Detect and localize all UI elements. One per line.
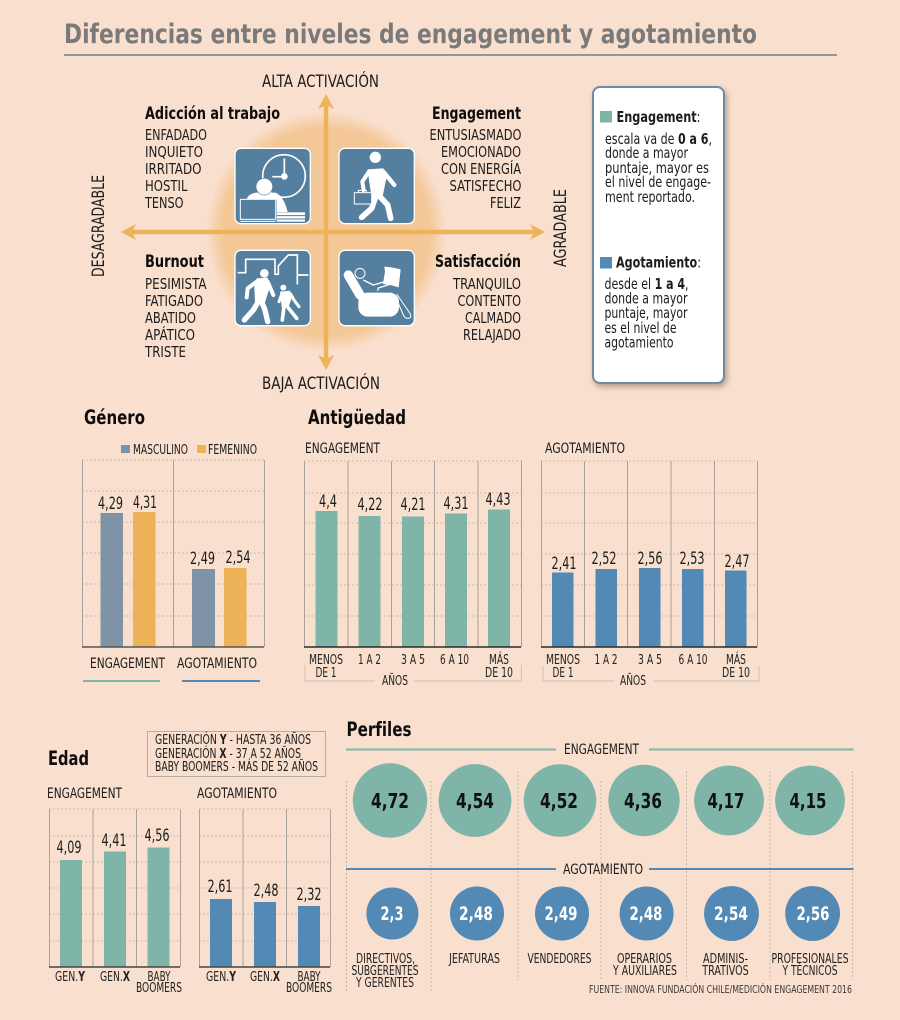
values: 4,09 bbox=[56, 838, 82, 857]
values: 4,29 bbox=[98, 494, 123, 513]
quadrant text: adiccion al trabajo bbox=[144, 104, 280, 212]
engagement circles: 4,17 bbox=[708, 789, 744, 813]
quadrant text: engagement: CON ENERGÍA bbox=[441, 159, 521, 178]
axis label: alta activacion: ALTA ACTIVACIÓN bbox=[262, 72, 379, 91]
engagement scale text: Engagement: bbox=[616, 108, 700, 126]
quadrant text: satisfaccion bbox=[435, 252, 521, 344]
quadrant text: burnout: APÁTICO bbox=[145, 325, 195, 344]
values: 2,53 bbox=[680, 549, 704, 568]
icon: person walking with briefcase bbox=[339, 148, 414, 224]
values: 4,21 bbox=[400, 495, 426, 514]
bars bbox=[100, 512, 246, 647]
axis labels bbox=[206, 970, 332, 996]
chart: antiguedad agotamiento: AGOTAMIENTO bbox=[545, 441, 625, 457]
axis labels: GEN.X bbox=[250, 970, 280, 985]
engagement circles: 4,52 bbox=[540, 789, 578, 813]
panel: scale legend bbox=[593, 87, 724, 383]
axis labels: AÑOS bbox=[620, 673, 646, 689]
engagement scale text: escala va de 0 a 6, bbox=[605, 130, 712, 148]
engagement scale text: donde a mayor bbox=[605, 144, 688, 162]
chart: edad agotamiento: AGOTAMIENTO bbox=[197, 786, 277, 802]
axis labels: MÁS bbox=[489, 652, 509, 668]
quadrant text: satisfaccion: CONTENTO bbox=[458, 292, 521, 310]
chart: antiguedad engagement: ENGAGEMENT bbox=[305, 441, 381, 457]
axis labels: MENOS bbox=[309, 653, 343, 668]
legend: MASCULINO bbox=[133, 443, 188, 458]
axis labels: GEN.Y bbox=[206, 970, 236, 985]
profile labels: VENDEDORES bbox=[528, 952, 592, 967]
category labels: AGOTAMIENTO bbox=[177, 656, 257, 672]
axis labels: GEN.X bbox=[100, 970, 130, 985]
axis label: baja activacion: BAJA ACTIVACIÓN bbox=[262, 374, 380, 393]
axis labels: 3 A 5 bbox=[638, 653, 662, 668]
generations legend box: GENERACIÓN X - 37 A 52 AÑOS bbox=[155, 746, 301, 762]
horizontal arrow bbox=[121, 224, 545, 240]
profiles: agotamiento row bbox=[346, 862, 854, 991]
quadrant text: adiccion al trabajo: INQUIETO bbox=[145, 143, 203, 161]
icon: workaholic at desk with clock bbox=[235, 148, 310, 224]
values: 2,61 bbox=[208, 877, 232, 896]
profile labels: PROFESIONALES bbox=[772, 952, 848, 967]
quadrant text: adiccion al trabajo: TENSO bbox=[144, 194, 184, 212]
values: 4,31 bbox=[444, 494, 468, 513]
values: 2,52 bbox=[592, 549, 616, 568]
bars bbox=[60, 848, 170, 967]
axis labels: GEN.Y bbox=[55, 970, 85, 985]
values: 2,41 bbox=[552, 554, 576, 573]
engagement scale text: ment reportado. bbox=[605, 188, 695, 206]
values: 4,56 bbox=[144, 826, 170, 845]
values: 2,49 bbox=[190, 549, 215, 568]
heading: perfiles: Perfiles bbox=[346, 718, 412, 741]
agotamiento scale text: desde el 1 a 4, bbox=[604, 275, 688, 293]
quadrant text: adiccion al trabajo: ENFADADO bbox=[145, 126, 207, 144]
agotamiento circles: 2,3 bbox=[380, 903, 404, 925]
quadrant text: satisfaccion: Satisfacción bbox=[435, 252, 521, 271]
quadrant text: burnout bbox=[144, 252, 207, 361]
profile labels: ADMINIS- bbox=[703, 952, 748, 967]
axis labels bbox=[55, 970, 182, 996]
values bbox=[98, 493, 250, 568]
values: 4,31 bbox=[133, 493, 157, 512]
axis labels: 1 A 2 bbox=[358, 653, 381, 668]
quadrant text: engagement: ENTUSIASMADO bbox=[430, 126, 522, 144]
engagement circles: 4,15 bbox=[790, 789, 826, 813]
quadrant text: satisfaccion: CALMADO bbox=[465, 309, 521, 327]
values: 2,54 bbox=[226, 548, 250, 567]
axis label: agradable: AGRADABLE bbox=[551, 189, 570, 267]
axis labels: DE 10 bbox=[722, 666, 750, 681]
legend: FEMENINO bbox=[208, 443, 257, 458]
axis labels: BABY bbox=[298, 970, 321, 985]
agotamiento scale text: es el nivel de bbox=[604, 319, 676, 337]
axis labels bbox=[543, 652, 759, 689]
values: 4,4 bbox=[319, 492, 337, 511]
category labels bbox=[83, 656, 260, 681]
agotamiento circles: 2,56 bbox=[796, 903, 830, 925]
values: 4,22 bbox=[358, 495, 382, 514]
engagement scale text bbox=[600, 108, 712, 206]
axis label: desagradable: DESAGRADABLE bbox=[89, 175, 108, 277]
generations legend box: GENERACIÓN Y - HASTA 36 AÑOS bbox=[155, 732, 311, 748]
title: Diferencias entre niveles de engagement y agotamiento bbox=[64, 19, 757, 50]
quadrant text: satisfaccion: TRANQUILO bbox=[452, 275, 521, 293]
axis labels: 6 A 10 bbox=[678, 653, 708, 668]
values: 2,47 bbox=[724, 552, 750, 571]
agotamiento divider: AGOTAMIENTO bbox=[563, 862, 643, 878]
profile labels: SUBGERENTES bbox=[352, 964, 418, 979]
quadrant text: adiccion al trabajo: HOSTIL bbox=[145, 177, 188, 195]
agotamiento scale text: puntaje, mayor bbox=[604, 304, 688, 322]
quadrant text: burnout: TRISTE bbox=[144, 343, 186, 361]
axis labels: BOOMERS bbox=[286, 981, 332, 996]
engagement circles: 4,54 bbox=[456, 789, 494, 813]
agotamiento scale text: donde a mayor bbox=[604, 290, 688, 308]
profiles: engagement row bbox=[346, 742, 854, 838]
profile columns dividers bbox=[346, 771, 852, 992]
axis labels: MENOS bbox=[546, 653, 580, 668]
chart: antiguedad agotamiento bbox=[541, 441, 759, 689]
legend bbox=[121, 443, 257, 458]
profile labels: Y TÉCNICOS bbox=[782, 963, 838, 979]
quadrant text: engagement bbox=[430, 104, 522, 212]
halo circle bbox=[206, 112, 446, 352]
axis labels: DE 1 bbox=[552, 666, 574, 681]
values bbox=[319, 490, 510, 514]
values: 2,32 bbox=[296, 885, 322, 904]
profile labels: DIRECTIVOS, bbox=[356, 952, 415, 967]
heading: edad: Edad bbox=[48, 747, 89, 770]
agotamiento scale text: Agotamiento: bbox=[616, 254, 701, 272]
quadrant text: satisfaccion: RELAJADO bbox=[463, 326, 521, 344]
axis labels bbox=[305, 652, 522, 689]
axis labels: 3 A 5 bbox=[401, 653, 425, 668]
agotamiento circles: 2,54 bbox=[714, 903, 748, 925]
axis labels: MÁS bbox=[726, 652, 746, 668]
profile labels bbox=[352, 952, 848, 991]
chart: edad engagement: ENGAGEMENT bbox=[47, 786, 123, 802]
axis labels: DE 1 bbox=[316, 666, 336, 681]
engagement circles bbox=[353, 763, 845, 838]
quadrant text: engagement: FELIZ bbox=[490, 194, 521, 212]
quadrant text: engagement: EMOCIONADO bbox=[441, 143, 521, 161]
bars bbox=[316, 510, 510, 647]
chart: antiguedad engagement bbox=[304, 441, 522, 689]
values: 4,43 bbox=[486, 490, 510, 509]
quadrant text: burnout: PESIMISTA bbox=[145, 275, 207, 293]
axis labels: AÑOS bbox=[382, 673, 408, 689]
heading: genero: Género bbox=[84, 406, 145, 429]
chart: genero bbox=[82, 443, 264, 681]
values: 2,56 bbox=[638, 549, 662, 568]
engagement circles: 4,36 bbox=[624, 789, 662, 813]
quadrant text: engagement: Engagement bbox=[432, 104, 521, 123]
values: 4,41 bbox=[102, 831, 126, 850]
icon: adult and child walking out of building bbox=[235, 250, 310, 326]
values bbox=[208, 877, 322, 904]
values: 2,48 bbox=[254, 881, 278, 900]
agotamiento circles: 2,49 bbox=[544, 903, 578, 925]
values bbox=[552, 549, 750, 573]
engagement scale text: el nivel de engage- bbox=[605, 173, 711, 191]
profile labels: Y AUXILIARES bbox=[612, 964, 677, 979]
profile labels: Y GERENTES bbox=[355, 976, 414, 991]
generations legend box bbox=[148, 732, 326, 776]
quadrant diagram bbox=[89, 72, 570, 393]
category labels: ENGAGEMENT bbox=[90, 656, 166, 672]
values bbox=[56, 826, 170, 857]
icon: person relaxing in recliner bbox=[339, 250, 414, 326]
bars bbox=[210, 899, 320, 967]
engagement divider: ENGAGEMENT bbox=[564, 742, 640, 758]
quadrant text: engagement: SATISFECHO bbox=[450, 177, 522, 195]
heading: antiguedad: Antigüedad bbox=[308, 406, 406, 429]
profile labels: JEFATURAS bbox=[448, 952, 500, 967]
axis labels: 6 A 10 bbox=[440, 653, 469, 668]
agotamiento circles: 2,48 bbox=[630, 903, 662, 925]
axis labels: BOOMERS bbox=[136, 981, 182, 996]
quadrant text: burnout: Burnout bbox=[145, 252, 204, 271]
quadrant text: adiccion al trabajo: IRRITADO bbox=[145, 160, 202, 178]
quadrant text: adiccion al trabajo: Adicción al trabajo bbox=[145, 104, 280, 123]
axis labels: BABY bbox=[148, 970, 171, 985]
generations legend box: BABY BOOMERS - MÁS DE 52 AÑOS bbox=[155, 759, 318, 775]
quadrant text: burnout: FATIGADO bbox=[145, 292, 203, 310]
agotamiento scale text bbox=[600, 254, 701, 352]
chart: edad engagement bbox=[47, 786, 182, 996]
chart: edad agotamiento bbox=[197, 786, 332, 996]
engagement scale text: puntaje, mayor es bbox=[605, 159, 709, 177]
axis labels: 1 A 2 bbox=[594, 653, 618, 668]
profile labels: OPERARIOS bbox=[617, 952, 672, 967]
profile labels: TRATIVOS bbox=[701, 964, 749, 979]
axis labels: DE 10 bbox=[485, 666, 513, 681]
bars bbox=[552, 568, 746, 647]
agotamiento circles bbox=[366, 886, 840, 941]
quadrant text: burnout: ABATIDO bbox=[145, 309, 196, 327]
vertical arrow bbox=[318, 94, 334, 370]
agotamiento circles: 2,48 bbox=[459, 903, 493, 925]
agotamiento scale text: agotamiento bbox=[604, 334, 674, 352]
engagement circles: 4,72 bbox=[371, 789, 409, 813]
